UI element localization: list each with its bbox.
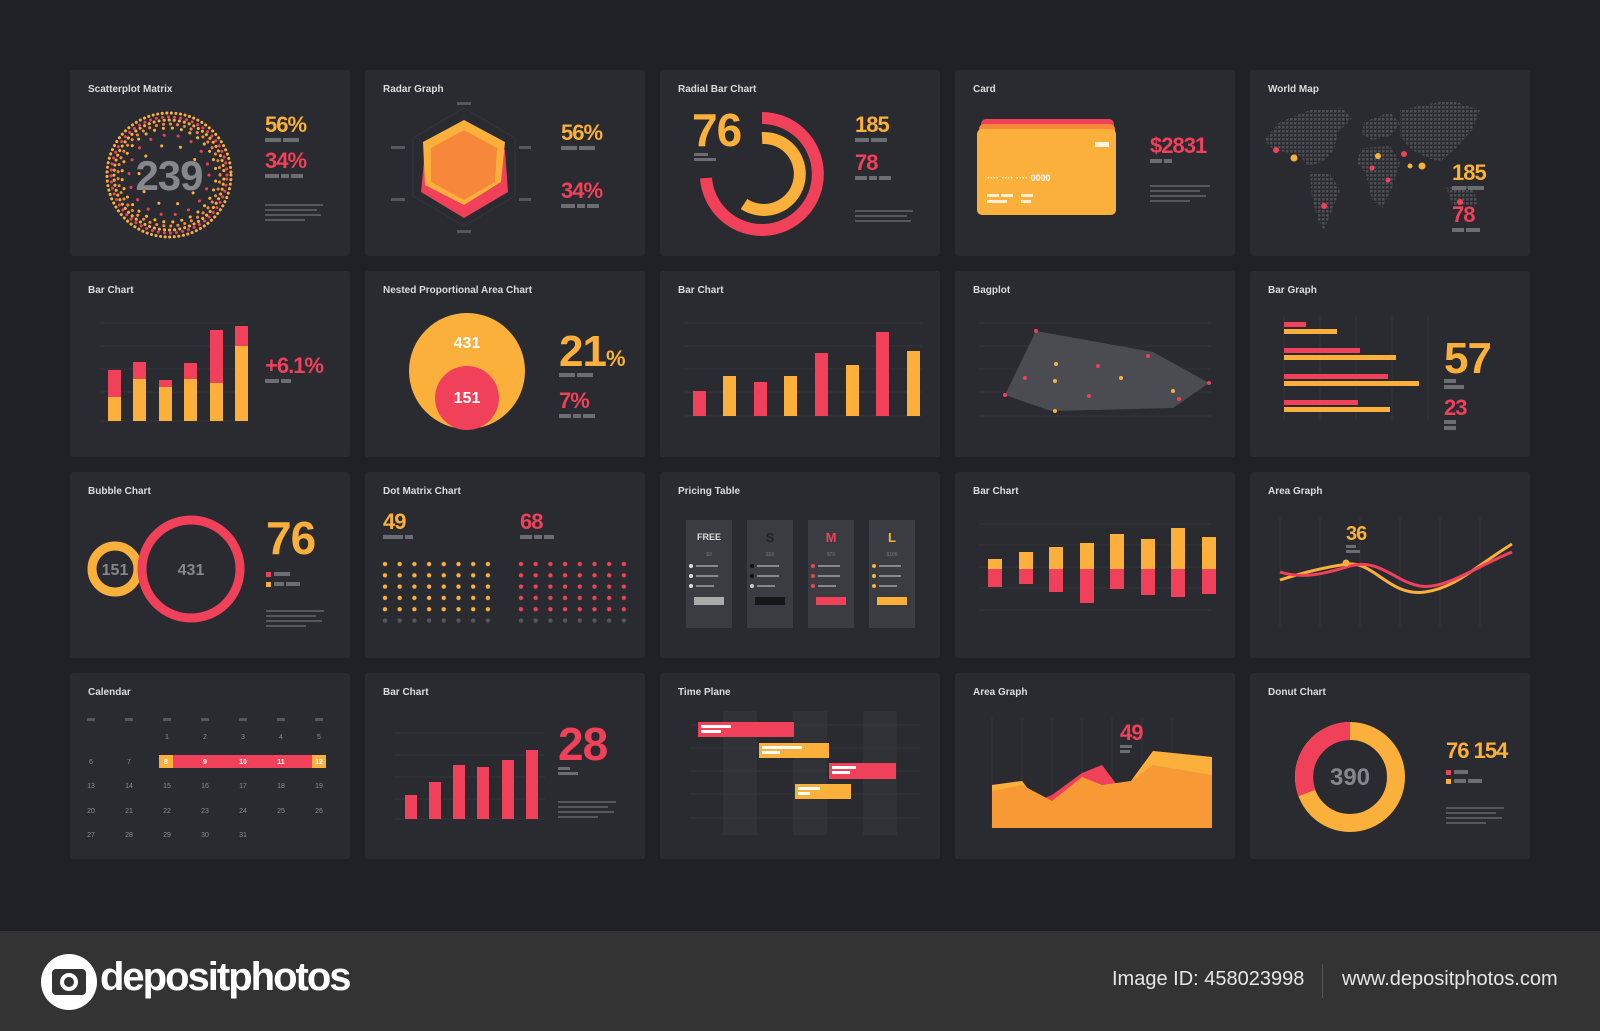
calendar grid: 14: [125, 783, 133, 790]
panel: scatterplot matrix: Scatterplot Matrix: [88, 84, 173, 95]
stats: $2831: [1150, 133, 1207, 158]
panel: card: [955, 70, 1235, 256]
chart: red dots: [518, 561, 636, 629]
stats: [1446, 738, 1509, 824]
pricing columns: L: [888, 530, 896, 545]
stat 49: 49: [383, 509, 406, 534]
calendar grid: 16: [201, 783, 209, 790]
calendar grid: 7: [127, 759, 131, 766]
stats: 76: [266, 512, 315, 564]
calendar grid: 12: [315, 759, 323, 766]
panel: area graph lines: Area Graph: [1268, 486, 1322, 497]
panel: bar chart diverging: Bar Chart: [973, 486, 1019, 497]
stats: 34%: [561, 178, 602, 203]
footer: [0, 931, 1600, 1031]
calendar grid: 11: [277, 759, 285, 766]
chart: bubbles: [92, 520, 240, 618]
calendar grid: 26: [315, 808, 323, 815]
stats: 23: [1444, 395, 1467, 420]
stat 49: [383, 509, 413, 539]
stat 36: 36: [1346, 523, 1367, 545]
calendar grid: 6: [89, 759, 93, 766]
pricing columns: S: [766, 530, 775, 545]
calendar grid: 21: [125, 808, 133, 815]
calendar grid: 24: [239, 808, 247, 815]
calendar grid: 31: [239, 832, 247, 839]
panel: area graph: Area Graph: [973, 687, 1027, 698]
panel: bagplot: Bagplot: [973, 285, 1011, 296]
calendar grid: 25: [277, 808, 285, 815]
chart: radial bars: [706, 118, 818, 230]
panel: dot matrix chart: Dot Matrix Chart: [383, 486, 461, 497]
stats: 185: [855, 112, 889, 137]
pricing columns: $0: [706, 552, 712, 558]
chart: nested circles: 431: [454, 335, 480, 352]
stats: [1452, 160, 1486, 232]
chart: radar: [391, 102, 531, 233]
panel: bar graph horizontal: [1250, 271, 1530, 457]
panel: bar chart 1: Bar Chart: [88, 285, 134, 296]
number 76: 76: [692, 104, 741, 156]
panel: bar chart 3: [365, 673, 645, 859]
panel: area graph lines: [1250, 472, 1530, 658]
pricing columns: $50: [766, 552, 774, 558]
stats: 7%: [559, 388, 589, 413]
image id: Image ID: 458023998: [1112, 968, 1304, 990]
calendar grid: 2: [203, 734, 207, 741]
chart: dotted world map: [1264, 100, 1480, 230]
calendar grid: 23: [201, 808, 209, 815]
stats: 78: [1452, 202, 1475, 227]
chart: diverging bars: [988, 528, 1216, 603]
panel: bagplot: [955, 271, 1235, 457]
calendar grid: 22: [163, 808, 171, 815]
stats: 57: [1444, 334, 1491, 383]
icon: credit card stack: ···· ···· ···· 0000: [987, 173, 1050, 183]
chart: donut: 390: [1330, 764, 1370, 791]
icon: credit card stack: [977, 119, 1116, 215]
calendar grid: [87, 718, 326, 839]
panel: world map: World Map: [1268, 84, 1319, 95]
chart: donut: [1304, 731, 1396, 823]
stats: 76 154: [1446, 738, 1509, 763]
chart: scatter ring: [107, 113, 231, 237]
stat 49: 49: [1120, 720, 1143, 745]
calendar grid: 5: [317, 734, 321, 741]
panel: bar graph horizontal: Bar Graph: [1268, 285, 1317, 296]
panel: area graph: [955, 673, 1235, 859]
stats: 185: [1452, 160, 1486, 185]
stat 68: 68: [520, 509, 543, 534]
pricing columns: M: [826, 530, 836, 545]
calendar grid: 17: [239, 783, 247, 790]
panel: radar graph: [365, 70, 645, 256]
chart: gantt bars: [698, 722, 896, 799]
calendar grid: 27: [87, 832, 95, 839]
calendar grid: 30: [201, 832, 209, 839]
stats: [265, 112, 323, 221]
panel: radial bar chart: [660, 70, 940, 256]
stats: [1150, 133, 1210, 202]
stats: [559, 327, 625, 418]
panel: scatterplot matrix: [70, 70, 350, 256]
panel: nested proportional area chart: [365, 271, 645, 457]
panel: donut chart: [1250, 673, 1530, 859]
chart: bars: [693, 332, 920, 416]
panel: time plane: [660, 673, 940, 859]
panel: donut chart: Donut Chart: [1268, 687, 1326, 698]
panel: bubble chart: [70, 472, 350, 658]
logo: [41, 954, 350, 1010]
chart: horizontal bars: [1284, 322, 1419, 412]
stats: 21%: [559, 327, 625, 376]
stats: 56%: [561, 120, 602, 145]
stat 28: [558, 718, 616, 818]
calendar grid: 1: [165, 734, 169, 741]
panel: bar chart 2: Bar Chart: [678, 285, 724, 296]
calendar grid: 19: [315, 783, 323, 790]
chart: bagplot: [1003, 329, 1211, 413]
pricing columns: $100: [886, 552, 898, 558]
calendar grid: 8: [164, 759, 168, 766]
pricing columns: FREE: [697, 532, 721, 542]
chart: nested circles: [409, 313, 525, 430]
stats: [266, 512, 324, 627]
stats: 78: [855, 150, 878, 175]
calendar grid: 3: [241, 734, 245, 741]
chart: yellow dots: [382, 561, 500, 629]
stats: [1444, 334, 1491, 430]
pricing columns: $70: [827, 552, 835, 558]
stat +6.1%: +6.1%: [265, 353, 323, 378]
calendar grid: 18: [277, 783, 285, 790]
chart: stacked bars: [108, 326, 248, 421]
panel: time plane: Time Plane: [678, 687, 731, 698]
calendar grid: 29: [163, 832, 171, 839]
chart: areas: [992, 751, 1212, 828]
stat 28: 28: [558, 718, 608, 770]
panel: bar chart 1: [70, 271, 350, 457]
calendar grid: 4: [279, 734, 283, 741]
panel: bar chart diverging: [955, 472, 1235, 658]
chart: nested circles: 151: [454, 390, 480, 407]
panel: card: Card: [973, 84, 996, 95]
chart: bubbles: 151: [102, 562, 128, 579]
panel: world map: [1250, 70, 1530, 256]
panel: dot matrix chart: [365, 472, 645, 658]
calendar grid: 10: [239, 759, 247, 766]
chart: bubbles: 431: [178, 562, 204, 579]
stats: [561, 120, 602, 208]
logo: depositphotos: [100, 955, 350, 999]
calendar grid: 15: [163, 783, 171, 790]
number 239: 239: [135, 152, 203, 199]
panel: pricing table: [660, 472, 940, 658]
panel: radial bar chart: Radial Bar Chart: [678, 84, 757, 95]
stats: 34%: [265, 148, 306, 173]
calendar grid: 28: [125, 832, 133, 839]
panel: radar graph: Radar Graph: [383, 84, 444, 95]
panel: nested proportional area chart: Nested Proportional Area Chart: [383, 285, 533, 296]
stats: 56%: [265, 112, 306, 137]
panel: bar chart 3: Bar Chart: [383, 687, 429, 698]
panel: bar chart 2: [660, 271, 940, 457]
calendar grid: 13: [87, 783, 95, 790]
calendar grid: 9: [203, 759, 207, 766]
calendar grid: 20: [87, 808, 95, 815]
website url: www.depositphotos.com: [1342, 968, 1558, 990]
stat 68: [520, 509, 554, 539]
chart: lines: [1280, 544, 1512, 592]
pricing columns: [686, 520, 915, 628]
panel: bubble chart: Bubble Chart: [88, 486, 151, 497]
stats: [855, 112, 913, 222]
panel: calendar: [70, 673, 350, 859]
panel: calendar: Calendar: [88, 687, 131, 698]
chart: red bars: [405, 750, 538, 819]
panel: pricing table: Pricing Table: [678, 486, 740, 497]
